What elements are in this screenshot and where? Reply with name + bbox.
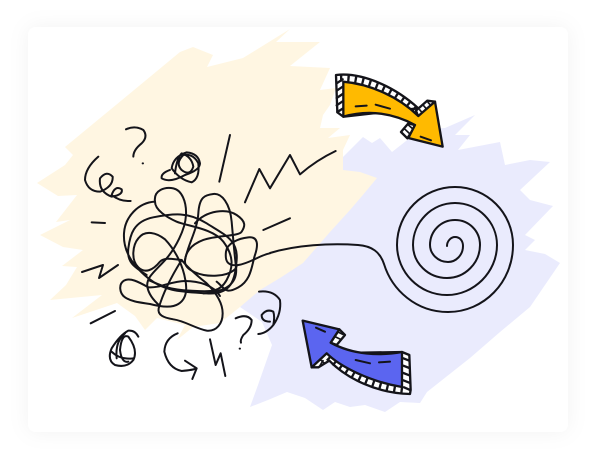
scribble ball [110, 331, 138, 366]
curl [85, 157, 131, 201]
curved arrow [164, 333, 197, 379]
arrow: blue [303, 321, 411, 394]
spiral [270, 187, 513, 312]
tick [91, 311, 115, 323]
scribble knot [162, 152, 200, 182]
tangle of lines [120, 188, 270, 331]
card background [28, 27, 568, 432]
lightning bolt [210, 339, 225, 376]
doodles: bottom cluster [82, 265, 280, 379]
dash left [92, 219, 105, 226]
zigzag [245, 151, 336, 202]
doodles: top cluster [85, 127, 336, 230]
question mark [126, 127, 145, 163]
brush stroke: yellow [37, 29, 377, 340]
question mark 2 [236, 316, 252, 349]
arrow: yellow [336, 75, 443, 147]
brush stroke: blue [240, 115, 560, 412]
small zigzag [82, 265, 118, 278]
straight tick [219, 135, 230, 182]
dash right [263, 218, 290, 230]
curl 2 [258, 291, 280, 334]
